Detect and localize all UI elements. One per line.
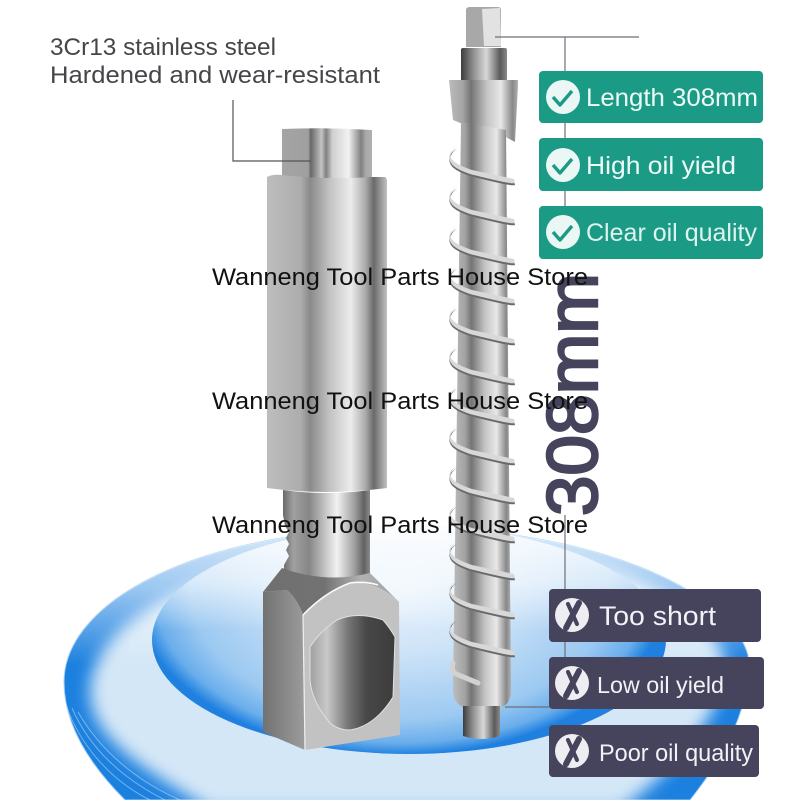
badge: clear oil quality: Clear oil quality (586, 219, 757, 247)
sleeve neck with threads (283, 490, 370, 580)
sleeve top stub (282, 128, 372, 180)
badge: length 308mm (539, 71, 763, 123)
part: spiral screw (449, 7, 518, 739)
dimension line (495, 37, 639, 707)
badge: low oil yield (549, 657, 764, 709)
collar (461, 48, 507, 81)
badge: clear oil quality (539, 206, 763, 259)
watermark text: Wanneng Tool Parts House Store (212, 264, 588, 291)
badge: high oil yield (539, 138, 763, 191)
watermark text: Wanneng Tool Parts House Store (212, 512, 588, 539)
sleeve main cylinder (267, 175, 387, 492)
badge: poor oil quality (549, 725, 759, 777)
dimension label 308mm: 308mm (534, 273, 613, 516)
watermark text: Wanneng Tool Parts House Store (212, 388, 588, 415)
watermark text (212, 264, 588, 539)
part: stainless steel sleeve (263, 128, 400, 750)
badge: length 308mm: Length 308mm (586, 84, 758, 112)
hex drive tip (466, 7, 501, 47)
badge: low oil yield: Low oil yield (597, 672, 724, 698)
block left face (263, 590, 305, 750)
blue lens disk background (64, 526, 748, 800)
bottom stub (463, 706, 500, 739)
badge: too short: Too short (599, 601, 717, 631)
flange and taper (449, 80, 518, 142)
threaded shaft (453, 122, 511, 708)
callout text: material: 3Cr13 stainless steel (50, 34, 276, 61)
spiral threads (449, 147, 515, 683)
callout leader: material (233, 100, 311, 161)
badge: poor oil quality: Poor oil quality (599, 740, 753, 767)
badge: high oil yield: High oil yield (586, 152, 736, 180)
callout text: material (50, 34, 380, 89)
callout text: material: Hardened and wear-resistant (50, 62, 380, 89)
inner blue bowl (152, 526, 666, 754)
block front face (303, 583, 400, 750)
oval opening (310, 616, 395, 730)
badge: too short (549, 589, 761, 642)
bevel shoulder (263, 568, 399, 615)
